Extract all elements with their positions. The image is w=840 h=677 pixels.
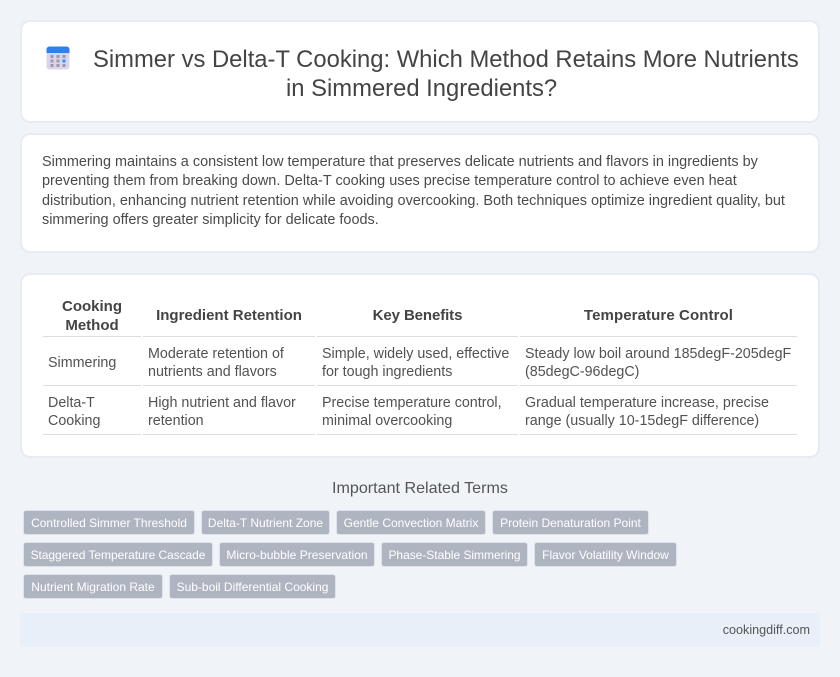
table cell: simmering benefits: for tough ingredients — [322, 364, 452, 380]
table cell: delta-t — [48, 395, 100, 429]
table cell: delta-t retention: retention — [148, 413, 204, 429]
table header: cooking method — [62, 298, 122, 334]
table cell: simmering retention — [148, 346, 284, 380]
tag: Staggered Temperature Cascade — [31, 548, 205, 562]
table cell: simmering temperature — [525, 346, 791, 380]
tag: Protein Denaturation Point — [500, 516, 641, 530]
tag: Phase-Stable Simmering — [388, 548, 521, 562]
tag: Nutrient Migration Rate — [31, 580, 155, 594]
text block: summary — [42, 154, 785, 228]
tag: Sub-boil Differential Cooking — [177, 580, 328, 594]
tag — [381, 542, 528, 567]
table cell: delta-t retention — [148, 395, 296, 429]
tag — [201, 510, 330, 535]
panel: summary card — [20, 133, 820, 253]
table cell: delta-t benefits: minimal overcooking — [322, 413, 452, 429]
heading: related terms: Important Related Terms — [332, 479, 508, 497]
footer bar — [20, 613, 820, 647]
footer source text: cookingdiff.com — [723, 623, 810, 637]
table header: ingredient retention: Ingredient Retention — [156, 307, 302, 324]
table cell: delta-t temperature: Gradual temperature increase, precise — [525, 395, 769, 411]
table header: key benefits: Key Benefits — [373, 307, 462, 324]
tag — [534, 542, 677, 567]
panel: comparison table card — [20, 273, 820, 458]
tag — [23, 574, 163, 599]
text block: summary: simmering offers greater simplicity for delicate foods. — [42, 212, 379, 228]
table cell: simmering benefits: Simple, widely used, effective — [322, 346, 509, 362]
text block: summary: preventing them from breaking down. Delta-T cooking uses precise temperature control to achieve even heat — [42, 173, 737, 189]
table cell: delta-t temperature — [525, 395, 769, 429]
table cell: simmering: Simmering — [48, 355, 116, 371]
tag: Gentle Convection Matrix — [344, 516, 478, 530]
icon: calendar — [46, 46, 70, 70]
table cell: delta-t temperature: range (usually 10-15degF difference) — [525, 413, 759, 429]
tag — [23, 510, 195, 535]
tag: Delta-T Nutrient Zone — [208, 516, 323, 530]
table cell: delta-t: Delta-T — [48, 395, 95, 411]
table header: cooking method: Method — [65, 317, 119, 334]
table cell: delta-t benefits — [322, 395, 502, 429]
table cell: simmering temperature: Steady low boil around 185degF-205degF — [525, 346, 791, 362]
tag: Micro-bubble Preservation — [226, 548, 368, 562]
tag — [336, 510, 486, 535]
table cell: delta-t retention: High nutrient and flavor — [148, 395, 296, 411]
title: Simmer vs Delta-T Cooking: Which Method Retains More Nutrients — [93, 46, 799, 73]
title line 2: in Simmered Ingredients? — [286, 75, 557, 102]
tag — [492, 510, 649, 535]
table header: temperature control: Temperature Control — [584, 307, 733, 324]
tag — [169, 574, 336, 599]
text block: summary: distribution, enhancing nutrient retention while avoiding overcooking. Both techniques optimize ingredient quality, but — [42, 193, 785, 209]
tag: Flavor Volatility Window — [542, 548, 669, 562]
table cell: delta-t benefits: Precise temperature control, — [322, 395, 502, 411]
table cell: simmering retention: nutrients and flavors — [148, 364, 277, 380]
table cell: simmering temperature: (85degC-96degC) — [525, 364, 639, 380]
text block: summary: Simmering maintains a consistent low temperature that preserves delicate nutrients and flavors in ingredients by — [42, 154, 758, 170]
table cell: simmering benefits — [322, 346, 509, 380]
table header: cooking method: Cooking — [62, 298, 122, 315]
tag — [219, 542, 375, 567]
table cell: delta-t: Cooking — [48, 413, 100, 429]
tag: Controlled Simmer Threshold — [31, 516, 187, 530]
panel: title card — [20, 20, 820, 123]
table cell: simmering retention: Moderate retention of — [148, 346, 284, 362]
tag — [23, 542, 213, 567]
